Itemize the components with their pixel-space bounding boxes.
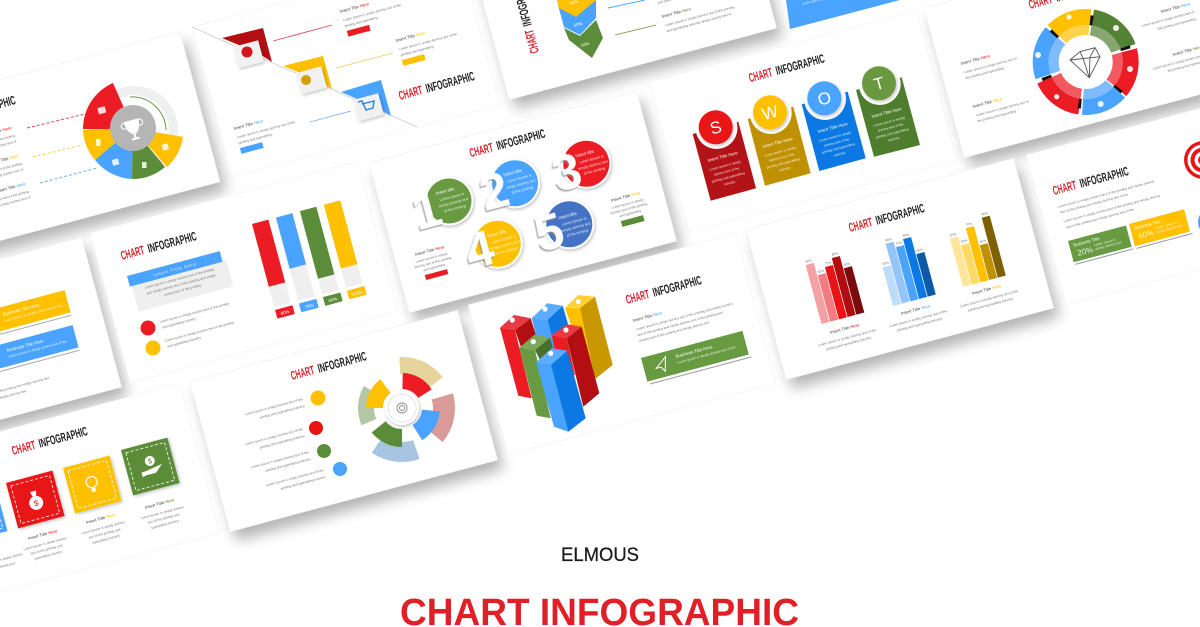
step 2 circle: simply dummy text [506,178,536,190]
step 5 circle: Insert title [558,211,578,220]
step 5 circle: 5 [528,202,570,263]
T panel: industry [888,136,900,143]
step 4 circle: 4 [459,219,500,280]
red bar chart: 70% [824,260,832,266]
red bar chart: 60% [843,262,851,267]
green callout with paper plane: Business Title Here [675,344,714,359]
slide: business bars (left edge) [0,237,122,459]
blue banner: Lorem Ipsum is simply dummy text of the [8,339,67,359]
step 3 circle: 3 [546,142,588,203]
step 5 circle: simply dummy text [561,221,591,233]
step 1 circle: of the printing [444,204,466,213]
yellow banner: Lorem Ipsum is simply dummy text of the [4,303,63,323]
red bar chart: 80% [831,251,839,257]
green card with hand and coin [121,438,180,495]
bar chart: 80% [280,309,290,316]
bullet text: Lorem Ipsum is simply dummy text of the [244,427,303,446]
slide: target and percent boxes [1026,83,1200,305]
W panel: dummy text of the [768,152,795,163]
step 2 circle [473,158,540,222]
bullet text: printing and typesetting industry [280,475,326,491]
card text: blue fragment [0,552,23,569]
slide title: CHART [119,243,146,263]
yellow percent box: Business Title [1134,219,1162,231]
text block yellow [395,22,461,66]
O panel: O [816,88,833,110]
blue panel at top edge [786,0,900,29]
bullet text: Lorem Ipsum is simply dummy text of the [244,397,303,416]
body text [1057,179,1163,230]
bullet text: printing and typesetting industry [259,434,305,450]
step 3 circle [546,139,611,203]
step 3 circle: Insert title [575,149,595,158]
blue card [0,486,8,543]
step 1 circle: 1 [406,180,448,241]
text blocks: Lorem Ipsum is simply dummy text of [976,99,1029,117]
T panel: printing and typesetting [875,127,909,140]
text block red [339,0,405,37]
text block left [411,243,455,282]
text blocks: Lorem Ipsum is simply dummy text of [964,56,1017,74]
bullet yellow [146,321,236,356]
bar chart [252,200,367,319]
slide title: INFOGRAPHIC [146,229,198,256]
text block [661,0,736,33]
slide: dashed square cards [0,383,220,605]
slide: stacked progress bars [90,161,398,383]
slide title: INFOGRAPHIC [774,51,826,78]
yellow bar chart: 70% [965,222,973,227]
chart caption red: Lorem Ipsum is simply dummy text of the [818,328,877,347]
text blocks: Insert Title Here [960,53,991,66]
slide title: CHART [289,363,316,383]
slide title: INFOGRAPHIC [495,126,547,153]
step 3 circle: Lorem Ipsum is [579,154,604,165]
slide title: CHART [468,140,495,160]
chevron stack [557,0,603,58]
step 5 circle: of the printing [566,228,589,238]
S panel: industry [724,180,736,187]
leader lines [608,0,656,35]
text block: Insert Title Here [632,310,663,323]
chart caption red: Insert Title Here [829,322,860,335]
bullet red [140,302,231,336]
yellow percent box [1129,209,1193,249]
blue bar chart: 70% [895,241,903,246]
step 4 circle: Insert title [487,229,507,238]
slide title: INFOGRAPHIC [1078,164,1130,191]
red bar chart [804,249,864,324]
chart caption yellow: Insert Title Here [971,283,1002,296]
card text: green: Lorem Ipsum is simply dummy [140,505,184,520]
slide title [847,201,926,235]
red bar chart: 80% [805,258,813,264]
text blocks [960,1,1200,123]
T panel: Insert Title Here [871,106,903,119]
slide title: CHART [1051,178,1078,198]
text block: Lorem Ipsum is simply dummy text of the printing [665,5,735,27]
text block red: printing and typesetting [344,15,378,28]
card text: yellow: typesetting industry [92,534,121,545]
T panel: dummy text of the [877,122,904,133]
card text: yellow [78,510,129,547]
chart caption blue: Insert Title Here [900,303,931,316]
slide title [468,126,547,160]
body text: text of the printing and simply dummy text of the [1066,207,1135,229]
text block yellow: printing and typesetting [400,44,434,57]
bullet text: printing and typesetting industry [265,457,311,473]
slide title: INFOGRAPHIC [874,201,926,228]
slide title: CHART [747,65,774,85]
bullet red: and typesetting industry [162,317,197,330]
green percent box: Lorem Ipsum is [1094,238,1117,247]
text block right [607,189,651,229]
green percent box: 20% [1076,245,1094,258]
text block: Lorem Ipsum is simply dummy text of the printing and simply dummy [636,302,734,331]
slide title: INFOGRAPHIC [424,69,476,96]
chart caption red [815,318,878,353]
O panel: printing and typesetting [821,142,855,155]
bullet text: Lorem Ipsum is simply dummy text of the [250,450,309,469]
card text: green: typesetting industry [151,519,180,530]
slide title: CHART [847,215,874,235]
blue heading box with gray body [127,250,233,312]
slide title: CHART [397,83,424,103]
slide title: INFOGRAPHIC [37,424,89,451]
bullet yellow: and typesetting industry [167,336,202,349]
text block left: Lorem Ipsum is simply [415,252,448,264]
text block: text of the printing and simply dummy text of the printing and [637,310,723,337]
text blocks: Lorem Ipsum is simply dummy text of [1141,10,1195,28]
slide title: CHART [624,287,651,307]
S panel [693,107,756,201]
W panel [748,92,811,186]
blue heading box with gray body: and simply dummy text of the printing and simply [146,273,216,295]
step 4 circle [459,219,523,280]
blue banner [0,325,79,376]
bar chart: 100% [351,289,363,297]
text blocks: the printing and typesetting [1157,17,1197,31]
text blocks: Insert Title Here [972,96,1003,109]
slide: radial pie with trophy [0,32,220,253]
yellow step with icon [283,56,332,94]
step 4 circle: of the printing [495,246,518,256]
blue heading box with gray body: Insert Title Here [153,261,197,278]
slide title: INFOGRAPHIC [651,273,703,300]
S panel: printing and typesetting [711,171,745,184]
slide title [1051,164,1130,198]
O panel [802,78,866,171]
card text: red: text of the printing and [30,543,63,556]
blue heading box with gray body: dummy text of the printing [164,283,202,297]
text block blue: Insert Title Here [233,118,264,131]
slide title [289,349,368,383]
yellow card with bulb [63,456,122,513]
chart caption red: printing and typesetting industry [826,335,872,351]
text block: dummy text of the printing and simply dummy text [639,320,710,343]
red card with money bag [6,471,65,528]
slide title [747,51,826,85]
text blocks [0,125,31,212]
card text: yellow: text of the printing and [88,527,121,540]
blue bar chart: 55% [916,247,923,253]
O panel: Lorem Ipsum is simply [819,130,852,143]
slide: SWOT [649,10,957,232]
step 2 circle: 2 [473,161,515,222]
chart caption yellow [957,279,1020,314]
icon: trophy [120,117,147,142]
body text: text of the printing and simply dummy text of the [1060,192,1129,215]
step 3 circle: of the printing [583,166,606,176]
text block yellow: Insert Title Here [395,30,426,43]
connector lines [273,25,393,122]
step 2 circle: of the printing [511,185,534,195]
S panel: S [708,117,724,138]
card text: green: text of the printing and [147,512,180,525]
icon: target [397,403,407,413]
S panel: dummy text of the [713,166,740,177]
text block blue: Lorem Ipsum is simply dummy text of the [237,120,296,139]
S panel: Insert Title Here [707,150,739,163]
text block right: Lorem Ipsum is simply [611,198,644,210]
chevron stack: 10% [580,41,590,48]
text block: simply dummy text [0,389,27,400]
slide: segmented radial chart [190,310,498,532]
step 4 circle: Lorem Ipsum is [491,234,516,245]
wheel chart with diamond [1022,0,1149,126]
O panel: industry [834,151,846,158]
bullets [309,390,347,476]
text block: the printing and simply dummy text [0,376,50,393]
wheel segment icons [1035,14,1133,107]
text block blue [233,110,299,154]
slide title [397,69,476,103]
icon: blue circle fragment [1198,208,1200,236]
step 1 circle: simply dummy text [438,197,469,209]
yellow bar chart: 45% [979,239,987,244]
W panel: Insert Title Here [762,136,794,149]
step 2 circle: Insert title [503,168,523,177]
W panel: industry [779,166,791,173]
bullet yellow: Lorem Ipsum is simply dummy text of the printing [164,321,235,343]
card text: green [137,495,188,532]
red card with money bag: $ [33,498,40,508]
blue bar chart [876,230,936,306]
blue bar chart: 50% [882,261,890,266]
pie chart with trophy [83,83,183,179]
yellow percent box: simply dummy text [1156,223,1183,234]
step 3 circle: simply dummy text [578,159,608,171]
blue banner: Business Title Here [6,338,45,353]
blue bar chart: 80% [902,232,910,238]
W panel: printing and typesetting [766,157,800,170]
step 1 circle: Lorem Ipsum is [439,192,465,202]
chart caption blue: Lorem Ipsum is simply dummy text of the [889,309,948,328]
slide title [624,273,703,307]
3D bar chart [500,295,613,432]
yellow bar chart: 80% [981,211,989,217]
red step with icon [222,28,272,68]
text block left: and typesetting [423,263,446,272]
step 1 circle [406,176,474,241]
icon: diamond [1070,48,1100,78]
step 5 circle: Lorem Ipsum is [562,216,587,227]
blue bar chart: 80% [885,237,892,243]
card text: yellow: Lorem Ipsum is simply dummy [81,520,125,535]
green card with hand and coin: $ [147,458,153,466]
green percent box [1068,225,1133,265]
card text: red: Lorem Ipsum is simply dummy [23,536,67,551]
card text: green: Insert Title Here [144,497,175,510]
slide title [10,424,89,458]
text block [632,292,737,343]
bullet text: printing and typesetting industry [259,404,305,420]
slide: diagonal steps [192,0,500,177]
O panel: Insert Title Here [817,121,849,134]
bullet text: Lorem Ipsum is simply dummy text of the [265,468,324,487]
radial chart [346,352,458,464]
bullet red: Lorem Ipsum is simply dummy text of the printing [159,302,230,324]
blue heading box with gray body: Lorem Ipsum is simply dummy text of the printing [144,267,215,290]
yellow percent box: Lorem Ipsum is [1155,221,1178,230]
text block left: Insert Title Here [414,244,445,257]
vertical slide title [508,0,542,55]
bullet text [244,397,326,494]
text blocks: Insert Title Here [1160,1,1191,14]
yellow banner [0,290,71,341]
card text: red: Insert Title Here [27,528,58,541]
step 1 circle: Insert title [435,186,455,196]
body text: Lorem Ipsum is simply dummy text of the printing and simply dummy [1057,179,1155,209]
chart caption yellow: printing and typesetting industry [968,296,1014,312]
text block red: Insert Title Here [339,1,370,14]
text block: and typesetting industry simply dummy text of [666,12,732,33]
icon: target [1184,141,1200,179]
step 5 circle [528,199,594,263]
vertical slide title: CHART [522,28,542,55]
text block right: and typesetting [619,209,642,218]
text block red: Lorem Ipsum is simply dummy text of the [343,3,402,22]
green callout with paper plane: Lorem Ipsum is simply dummy text of the [677,345,736,365]
text block right: dummy text of the printing [610,202,648,215]
T panel: T [872,73,887,94]
dashed leader lines [27,114,97,183]
T panel [856,63,920,157]
card text: red: typesetting industry [34,550,63,561]
green callout with paper plane [641,330,751,385]
card text: yellow: Insert Title Here [85,512,116,525]
card text: red [20,526,71,563]
text block yellow: Lorem Ipsum is simply dummy text of the [399,32,458,51]
chevron stack: 30% [573,21,583,28]
slide title: CHART [10,438,37,458]
slide title [119,229,198,263]
W panel: W [760,102,780,124]
yellow banner: Business Title Here [2,302,41,317]
blue step with cart icon [341,80,391,121]
brand name: ELMOUS [561,545,639,566]
chart caption blue: printing and typesetting industry [897,316,943,332]
green percent box: Business Title [1073,236,1101,248]
T panel: Lorem Ipsum is simply [873,115,906,128]
step 2 circle: Lorem Ipsum is [507,173,532,184]
text blocks: the printing and typesetting [965,66,1005,80]
S panel: Lorem Ipsum is simply [709,159,742,172]
step 4 circle: simply dummy text [490,239,520,251]
yellow percent box: 60% [1137,228,1155,241]
slide title [1027,0,1106,12]
slide: three bar charts [746,158,1054,380]
yellow bar chart: 50% [960,238,968,244]
text blocks: the printing and typesetting [977,109,1017,123]
text block blue: printing and typesetting [238,132,272,145]
slide: 3D bars [468,233,776,455]
chart caption yellow: Lorem Ipsum is simply dummy text of the [960,289,1019,308]
O panel: dummy text of the [823,137,850,148]
body text: Lorem Ipsum is simply dummy text of the printing and simply dummy [1063,194,1161,223]
chart caption blue [886,299,949,334]
yellow bar chart: 60% [949,232,957,238]
text block right: Insert Title Here [610,190,641,203]
slide: numbered circles [369,91,677,313]
slide title: INFOGRAPHIC [316,349,368,376]
bar chart: 60% [328,296,338,303]
green percent box: simply dummy text [1095,240,1122,251]
bar chart: 70% [304,302,314,310]
slide: arrow chevrons [469,0,777,100]
text block: Insert Title Here [661,6,692,19]
slide: diamond wheel [924,0,1200,158]
text block left: dummy text of the printing [414,256,452,269]
yellow bar chart [946,211,1006,287]
red bar chart: 50% [817,269,825,274]
W panel: Lorem Ipsum is simply [764,145,797,158]
